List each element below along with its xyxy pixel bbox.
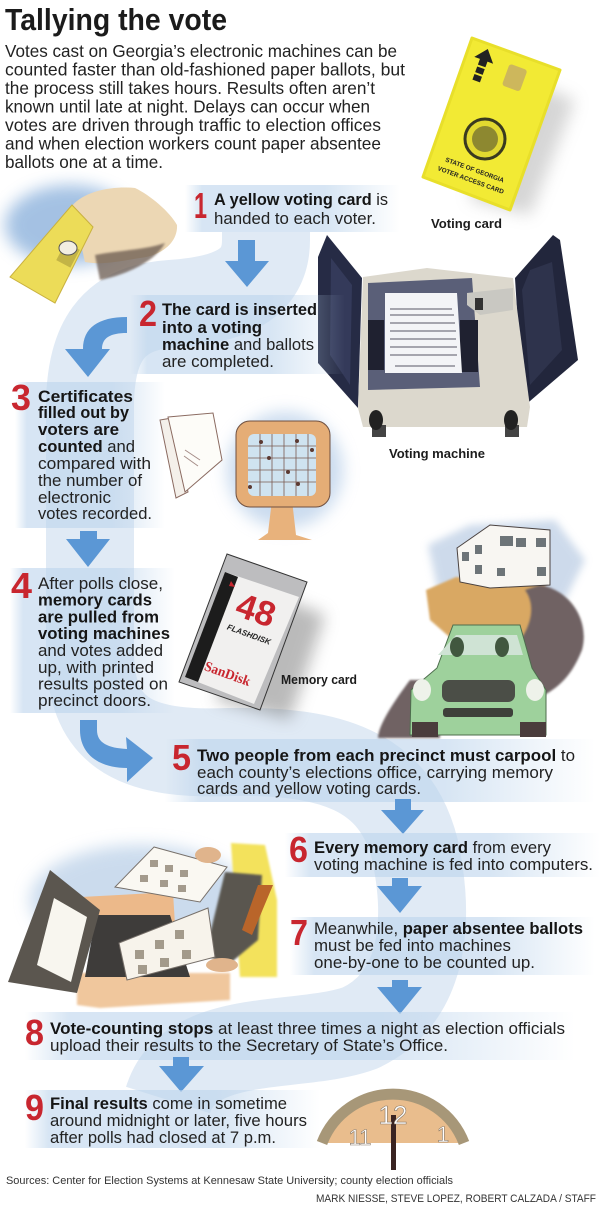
step 4: are pulled from — [38, 608, 159, 626]
step 4: precinct doors. — [38, 692, 151, 710]
step 3: the number of — [38, 472, 142, 490]
step 3: counted and — [38, 438, 135, 456]
step 3: compared with — [38, 455, 151, 473]
step 3: voters are — [38, 421, 119, 439]
step 9: 9 — [25, 1087, 44, 1128]
step 6 — [285, 829, 600, 877]
illustration: ballots being fed into counting machine — [8, 843, 277, 1008]
step 8: upload their results to the Secretary of State’s Office. — [50, 1037, 448, 1055]
step 2 — [130, 293, 345, 374]
step 3: Certificates — [38, 388, 133, 406]
step 4: up, with printed — [38, 659, 154, 677]
intro text block: and when election workers count paper absentee — [5, 134, 381, 154]
intro text block: votes are driven through traffic to election offices — [5, 115, 381, 135]
step 1: 1 — [194, 185, 207, 226]
sources: Sources: Center for Election Systems at Kennesaw State University; county election officials — [6, 1175, 453, 1187]
arrow: step 8 to 9 — [159, 1057, 204, 1092]
label: voting machine: Voting machine — [389, 446, 485, 461]
step 3 — [11, 377, 165, 528]
voting machine — [318, 235, 578, 437]
step 5: each county’s elections office, carrying memory — [197, 764, 554, 782]
step 2: The card is inserted — [162, 301, 317, 319]
illustration: clock near midnight: 1 — [437, 1122, 449, 1147]
step 9: around midnight or later, five hours — [50, 1112, 307, 1130]
step 7: 7 — [290, 912, 308, 953]
arrow: step 4 to 5 — [80, 720, 153, 782]
step 9 — [25, 1087, 320, 1148]
step 5: 5 — [172, 737, 191, 778]
step 2: into a voting — [162, 319, 262, 337]
step 5 — [165, 737, 595, 802]
step 7: one-by-one to be counted up. — [314, 954, 535, 972]
arrow: step 5 to 6 — [381, 799, 424, 834]
background flow swoosh — [90, 232, 422, 1100]
step 9: after polls had closed at 7 p.m. — [50, 1129, 276, 1147]
arrow: step 1 to 2 — [225, 240, 269, 287]
step 4: After polls close, — [38, 575, 163, 593]
title: Tallying the vote — [5, 2, 227, 37]
step 2: machine and ballots — [162, 336, 314, 354]
step 8: 8 — [25, 1012, 44, 1053]
illustration: building, road and green car — [378, 520, 585, 738]
step 1: handed to each voter. — [214, 210, 376, 228]
step 6: voting machine is fed into computers. — [314, 856, 593, 874]
memory card: SanDisk — [202, 659, 253, 690]
step 4: memory cards — [38, 592, 152, 610]
step 4: results posted on — [38, 676, 168, 694]
memory card — [179, 554, 325, 720]
intro text block: counted faster than old-fashioned paper ballots, but — [5, 60, 405, 80]
intro text block: known until late at night. Delays can occur when — [5, 96, 370, 116]
arrow: step 2 to 3 — [65, 317, 127, 377]
arrow: step 6 to 7 — [377, 878, 422, 913]
illustration: hand holding card — [5, 185, 177, 303]
label: memory card: Memory card — [281, 672, 357, 687]
label: voting card: Voting card — [431, 216, 502, 231]
step 2: 2 — [139, 293, 157, 334]
step 1 — [185, 185, 400, 232]
step 4: voting machines — [38, 625, 170, 643]
step 5: cards and yellow voting cards. — [197, 780, 421, 798]
icon: yellow voting card: STATE OF GEORGIA — [444, 157, 505, 185]
arrow: step 7 to 8 — [377, 980, 422, 1014]
step 3: votes recorded. — [38, 505, 152, 523]
step 3: 3 — [11, 377, 31, 418]
step 6: 6 — [289, 829, 308, 870]
memory card: FLASHDISK — [226, 623, 273, 647]
step 1: A yellow voting card is — [214, 191, 388, 209]
step 8 — [25, 1012, 575, 1060]
memory card: 48 — [231, 586, 281, 635]
step 4: 4 — [11, 565, 32, 606]
step 8: Vote-counting stops at least three times a night as election officials — [50, 1020, 565, 1038]
illustration: clock near midnight: 11 — [349, 1125, 371, 1150]
intro text block: the process still takes hours. Results often aren’t — [5, 78, 375, 98]
icon: yellow voting card — [423, 38, 575, 215]
illustration: clock near midnight — [322, 1094, 464, 1170]
arrow: step 3 to 4 — [66, 531, 110, 567]
step 4: and votes added — [38, 642, 163, 660]
icon: yellow voting card: VOTER ACCESS CARD — [436, 165, 505, 196]
intro text block — [5, 41, 405, 172]
intro text block: Votes cast on Georgia’s electronic machines can be — [5, 41, 397, 61]
illustration: certificates and monitor — [160, 412, 343, 540]
step 3: electronic — [38, 489, 111, 507]
step 9: Final results come in sometime — [50, 1095, 287, 1113]
step 3: filled out by — [38, 404, 130, 422]
step 2: are completed. — [162, 353, 274, 371]
illustration: clock near midnight: 12 — [379, 1100, 407, 1130]
step 4 — [10, 565, 175, 713]
step 5: Two people from each precinct must carpool to — [197, 747, 575, 765]
step 7 — [290, 912, 595, 975]
step 6: Every memory card from every — [314, 839, 552, 857]
intro text block: ballots one at a time. — [5, 152, 163, 172]
step 7: must be fed into machines — [314, 937, 511, 955]
step 7: Meanwhile, paper absentee ballots — [314, 920, 583, 938]
